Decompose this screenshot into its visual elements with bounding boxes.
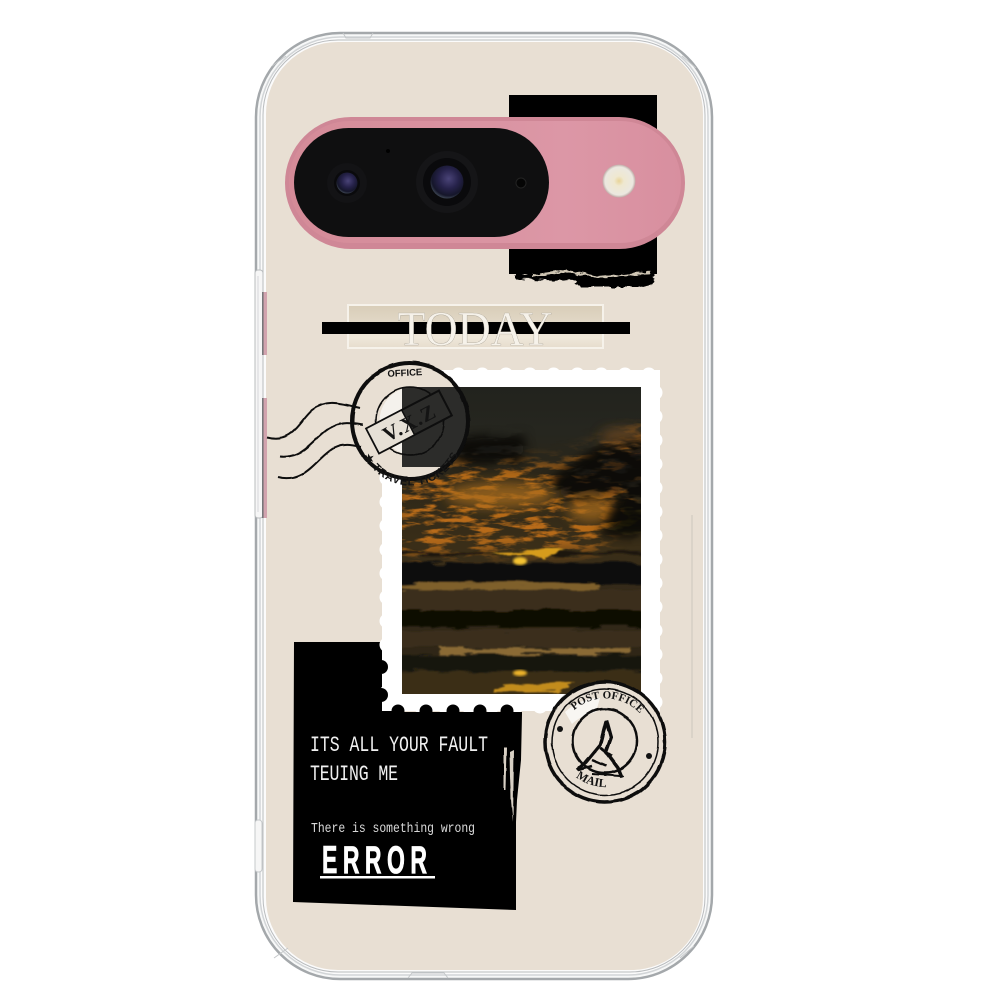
white perforated border: [387, 375, 655, 706]
camera bar: [285, 117, 685, 249]
today label: [322, 301, 630, 356]
icon: flash: [602, 164, 636, 198]
stamp: [374, 375, 655, 718]
side buttons: [255, 270, 692, 872]
sunset photo: [395, 387, 652, 696]
postmark disk: [380, 368, 466, 477]
emblem: [577, 720, 622, 778]
error heading: ERROR: [322, 838, 433, 882]
postmark rings: [352, 363, 468, 479]
line 1: ITS ALL YOUR FAULT: [310, 733, 488, 758]
orange clouds: [395, 425, 650, 555]
corner bumpers: [272, 33, 696, 978]
glass box: [348, 305, 603, 348]
travel tickets text: ★ TRAVEL TICKETS: [367, 452, 456, 486]
office text: OFFICE: [387, 367, 423, 380]
icon: sensor dots: [386, 149, 526, 188]
V.X.Z label: [366, 391, 452, 453]
textured dark clouds: [455, 435, 650, 535]
horizon bands: [395, 552, 650, 696]
black tape behind camera: [509, 95, 657, 287]
rings: [545, 682, 665, 802]
black lens window: [294, 128, 549, 237]
postmark: office: [266, 360, 470, 486]
post office text: POST OFFICE: [570, 691, 644, 713]
clear case outer shell: [256, 33, 712, 979]
disk: [545, 682, 665, 802]
line 3: There is something wrong: [311, 821, 475, 836]
pink pill: [285, 117, 685, 249]
soft dark clouds: [445, 429, 652, 535]
beige back panel: [266, 42, 703, 970]
title: TODAY: [397, 301, 553, 356]
black perforation holes: [374, 660, 522, 718]
sun reflections: [490, 549, 575, 693]
black bar: [322, 322, 630, 334]
V.X.Z label: V.X.Z: [379, 399, 440, 447]
mail text: MAIL: [576, 770, 606, 788]
phone case: [255, 33, 712, 979]
dots: [557, 726, 652, 759]
line 2: TEUING ME: [310, 762, 398, 787]
note text: [310, 733, 488, 882]
postmark: post office mail: [543, 680, 666, 804]
black note panel: [293, 642, 522, 910]
icon: main lens: [416, 151, 478, 213]
icon: small lens: [327, 163, 367, 203]
note panel torn edge: [504, 748, 514, 822]
postal waves: [267, 403, 363, 478]
underline: [320, 876, 435, 878]
